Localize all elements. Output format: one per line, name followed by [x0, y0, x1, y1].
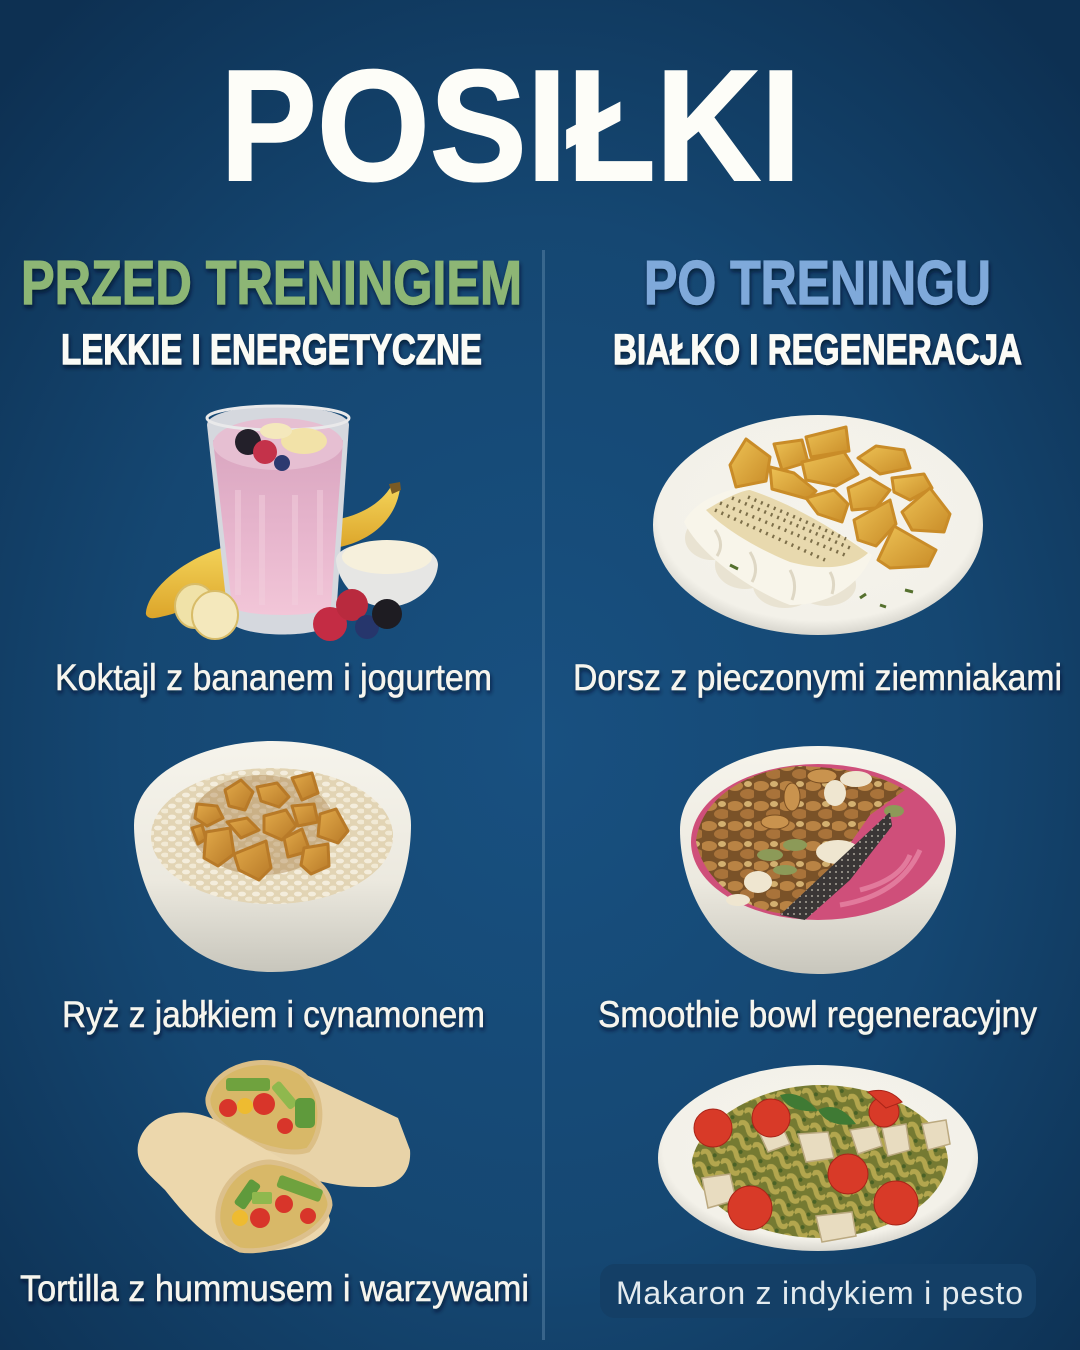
icon: pasta with turkey and pesto on plate	[658, 1065, 978, 1251]
icon: rice with apple and cinnamon bowl	[134, 741, 411, 972]
caption: smoothie bowl: Smoothie bowl regeneracyjny	[598, 994, 1037, 1035]
caption box: makaron: Makaron z indykiem i pesto	[616, 1275, 1023, 1311]
icon: cod with roasted potatoes on plate	[653, 415, 983, 635]
icon: banana smoothie with yogurt and berries	[146, 406, 438, 641]
caption box: makaron	[600, 1264, 1036, 1318]
caption: koktajl: Koktajl z bananem i jogurtem	[55, 657, 492, 698]
caption: ryż: Ryż z jabłkiem i cynamonem	[62, 994, 485, 1035]
heading: po treningu: PO TRENINGU	[644, 249, 991, 318]
heading: przed treningiem: PRZED TRENINGIEM	[21, 249, 522, 318]
icon: smoothie bowl with nuts and seeds	[680, 746, 956, 974]
caption: tortilla: Tortilla z hummusem i warzywami	[20, 1268, 529, 1309]
title: POSIŁKI	[220, 38, 801, 214]
icon: tortilla wraps with hummus and vegetables	[138, 1063, 410, 1252]
subheading: lekkie i energetyczne: LEKKIE I ENERGETYCZNE	[61, 326, 482, 374]
